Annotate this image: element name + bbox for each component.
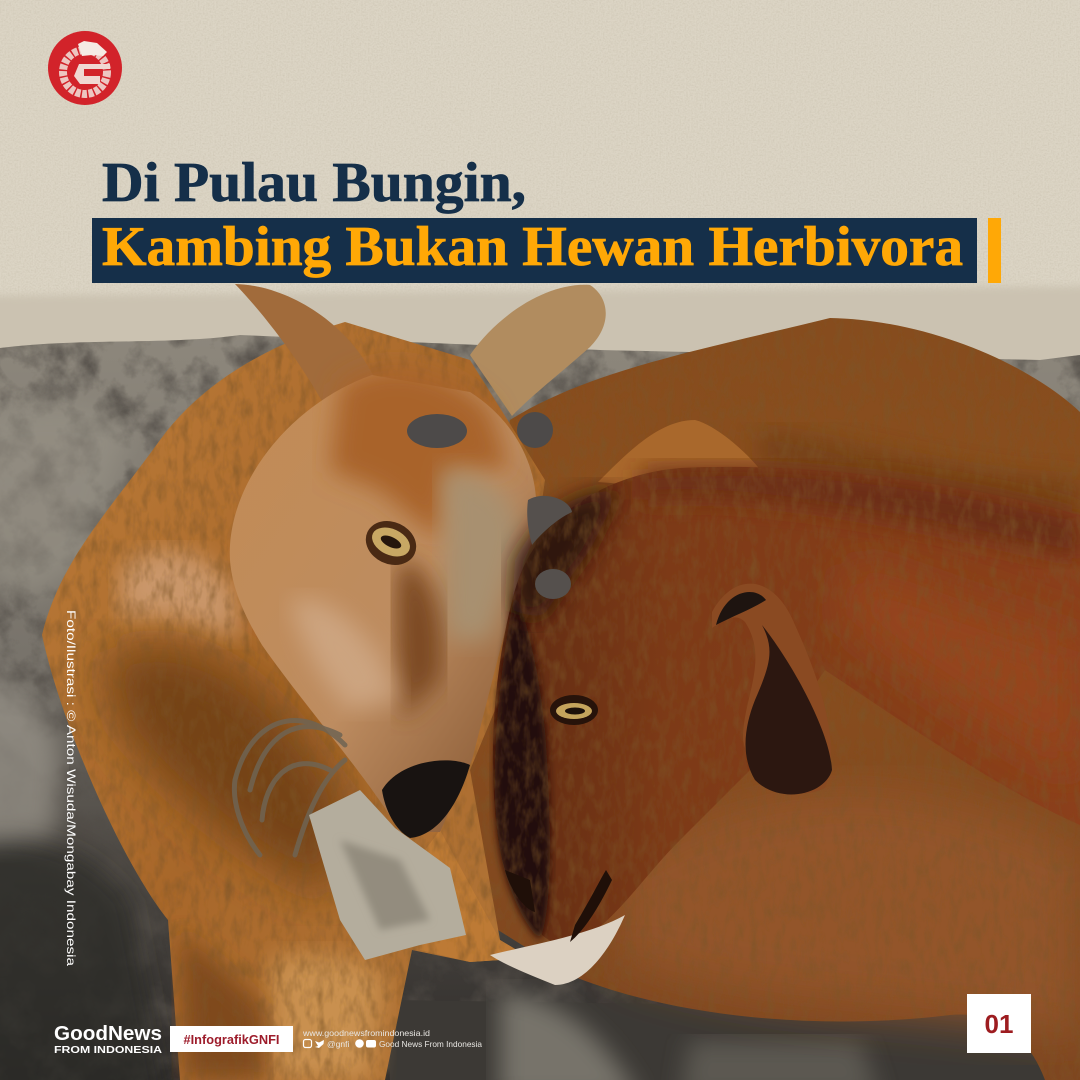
rock wall	[0, 335, 1080, 1080]
footer: website and social: Good News From Indonesia	[379, 1039, 482, 1049]
footer: GoodNews logotype: GoodNews	[54, 1023, 162, 1045]
page number badge: 01	[985, 1009, 1013, 1039]
left goat eye	[366, 521, 416, 565]
accent bar	[988, 218, 1001, 283]
left goat head	[230, 367, 536, 832]
photo credit: Foto/Ilustrasi : © Anton Wisuda/Mongabay Indonesia	[64, 610, 78, 966]
left goat body	[42, 322, 545, 1080]
footer: website and social: www.goodnewsfromindonesia.id	[302, 1028, 430, 1038]
footer: GoodNews logotype	[54, 1023, 162, 1056]
left goat horn stubs	[407, 412, 553, 448]
goat beard	[234, 720, 345, 855]
footer: GoodNews logotype: FROM INDONESIA	[54, 1045, 162, 1056]
photo: goats on rocks	[0, 284, 1080, 1080]
footer: hashtag badge	[170, 1026, 293, 1052]
title line one: Di Pulau Bungin,	[102, 152, 526, 214]
title line two on navy band: Kambing Bukan Hewan Herbivora	[102, 216, 963, 278]
icon: facebook	[355, 1039, 364, 1048]
right goat head and neck	[493, 467, 1080, 945]
sand ledge	[0, 286, 1080, 360]
logo: GNFI red circle	[48, 31, 122, 105]
footer: website and social: @gnfi	[327, 1039, 349, 1049]
right goat eye	[550, 695, 598, 725]
right goat nostrils and mouth	[505, 870, 612, 942]
right goat ear	[712, 584, 832, 794]
right goat horn stubs	[527, 496, 572, 599]
paper background	[0, 0, 1080, 360]
paper held in mouth	[309, 790, 466, 960]
right goat white chin patch	[490, 915, 625, 985]
icon: twitter	[315, 1040, 324, 1048]
footer: website and social	[302, 1028, 482, 1049]
left goat ear, right	[470, 285, 606, 416]
ground rocks lower right	[390, 1000, 1080, 1080]
left goat ear, left	[235, 284, 368, 400]
icon: youtube	[366, 1040, 376, 1048]
ear of back goat	[598, 420, 758, 484]
back goat body	[450, 318, 1080, 1080]
icon: instagram	[304, 1040, 312, 1048]
footer: hashtag badge: #InfografikGNFI	[184, 1033, 280, 1047]
page number badge	[967, 994, 1031, 1053]
left goat nose	[382, 760, 470, 838]
